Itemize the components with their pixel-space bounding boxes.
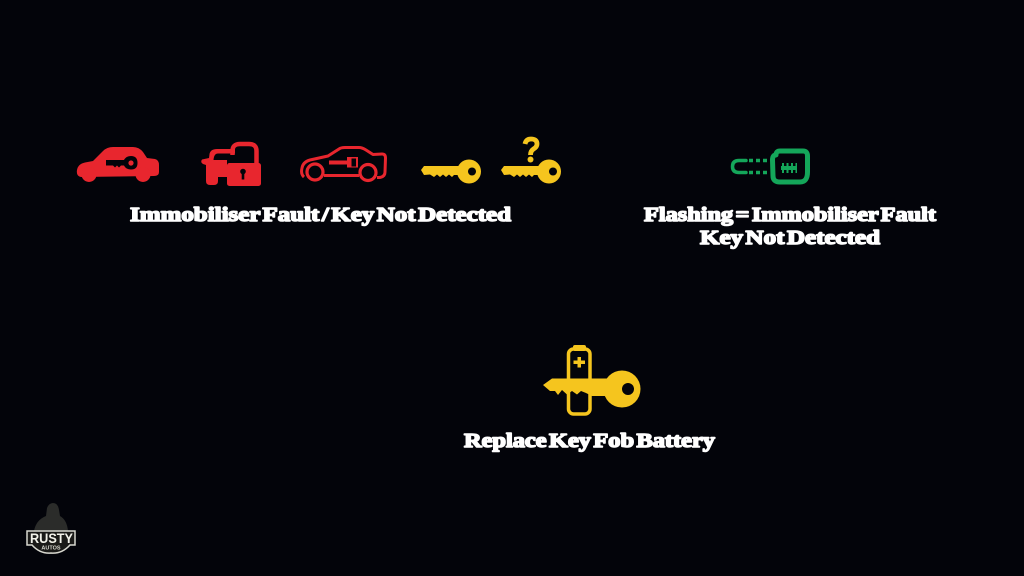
- icon: yellow key with question mark: [501, 139, 561, 184]
- panel: replace key fob battery: [464, 345, 715, 452]
- logo silhouette: [34, 503, 68, 531]
- icon: red car and padlock: [201, 144, 261, 186]
- heading: immobiliser fault: Immobiliser Fault / Key Not Detected: [130, 204, 511, 226]
- icon: red outlined car with key: [302, 148, 386, 180]
- text: replace key fob battery: Replace Key Fob Battery: [464, 430, 715, 452]
- logo badge: [27, 531, 75, 553]
- icon: yellow key: [421, 160, 481, 184]
- text: flashing immobiliser fault: Flashing = Immobiliser Fault: [644, 204, 936, 226]
- icon: key with battery: [543, 345, 640, 414]
- logo subtitle: AUTOS: [41, 546, 61, 552]
- panel: flashing green key: [644, 151, 936, 249]
- logo wordmark: RUSTY: [30, 530, 74, 546]
- icon: red solid car with key: [77, 147, 159, 182]
- logo: rusty autos: [27, 503, 75, 553]
- text: key not detected: Key Not Detected: [700, 227, 880, 249]
- icon: green key fob: [732, 151, 808, 182]
- panel: immobiliser fault symbols: [77, 139, 561, 226]
